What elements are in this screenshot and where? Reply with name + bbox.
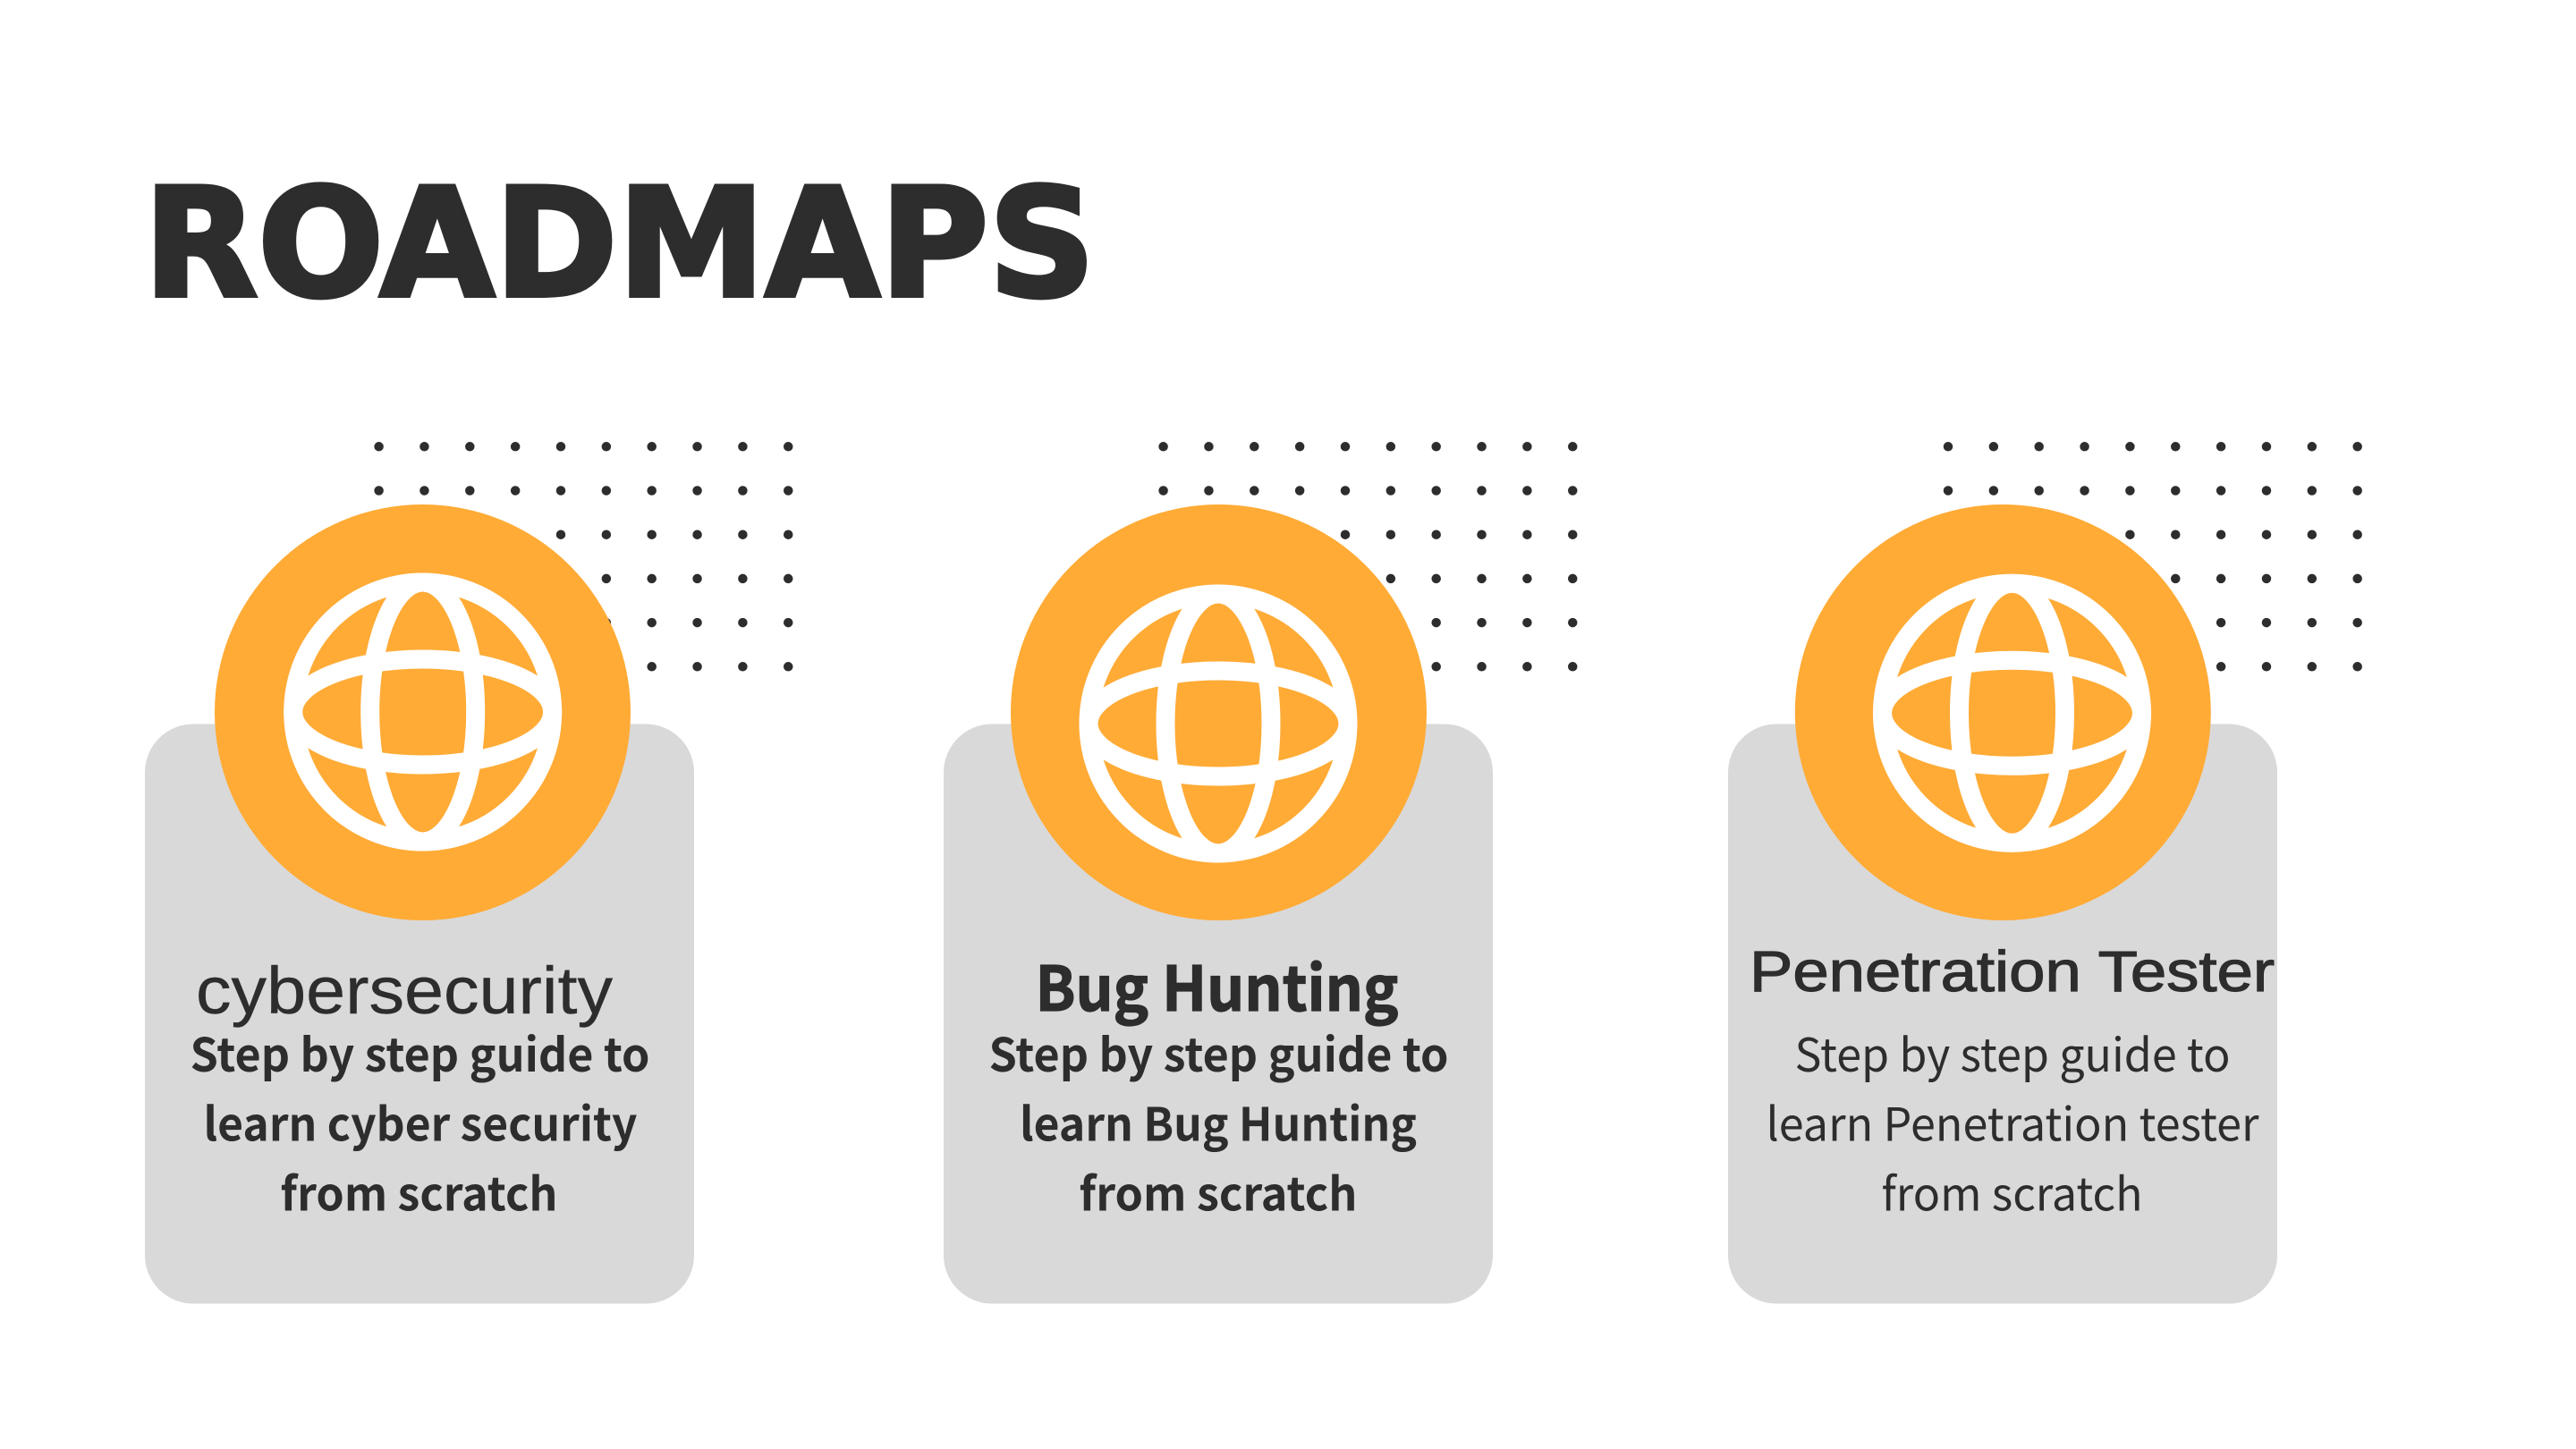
description: penetration tester <box>1766 1018 2259 1224</box>
title: ROADMAPS <box>144 157 1096 331</box>
description: bug hunting: from scratch <box>1079 1157 1358 1224</box>
dot grid: penetration tester <box>1948 446 2358 666</box>
panel: penetration tester <box>1728 446 2358 1304</box>
description: penetration tester: from scratch <box>1882 1157 2143 1224</box>
icon: globe on orange disc <box>1011 504 1427 920</box>
description: bug hunting: Step by step guide to <box>989 1018 1449 1085</box>
heading: bug hunting: Bug Hunting <box>1036 939 1399 1029</box>
icon: globe on orange disc <box>215 504 631 920</box>
description: cybersecurity: Step by step guide to <box>190 1018 649 1085</box>
card: cybersecurity <box>145 724 694 1304</box>
heading: penetration tester: Penetration Tester <box>1750 939 2275 1004</box>
panel: bug hunting <box>944 446 1572 1304</box>
description: bug hunting: learn Bug Hunting <box>1020 1088 1417 1154</box>
description: cybersecurity: from scratch <box>281 1157 558 1224</box>
panel: cybersecurity <box>145 446 788 1304</box>
card: penetration tester <box>1728 724 2277 1304</box>
description: cybersecurity <box>190 1018 649 1224</box>
description: penetration tester: Step by step guide to <box>1794 1018 2231 1085</box>
icon: globe on orange disc <box>1795 504 2211 920</box>
heading: cybersecurity: cybersecurity <box>196 953 613 1028</box>
dot grid: cybersecurity <box>379 446 788 666</box>
description: penetration tester: learn Penetration tester <box>1766 1088 2259 1154</box>
description: cybersecurity: learn cyber security <box>204 1088 637 1154</box>
card: bug hunting <box>944 724 1493 1304</box>
description: bug hunting <box>989 1018 1449 1224</box>
dot grid: bug hunting <box>1164 446 1572 666</box>
